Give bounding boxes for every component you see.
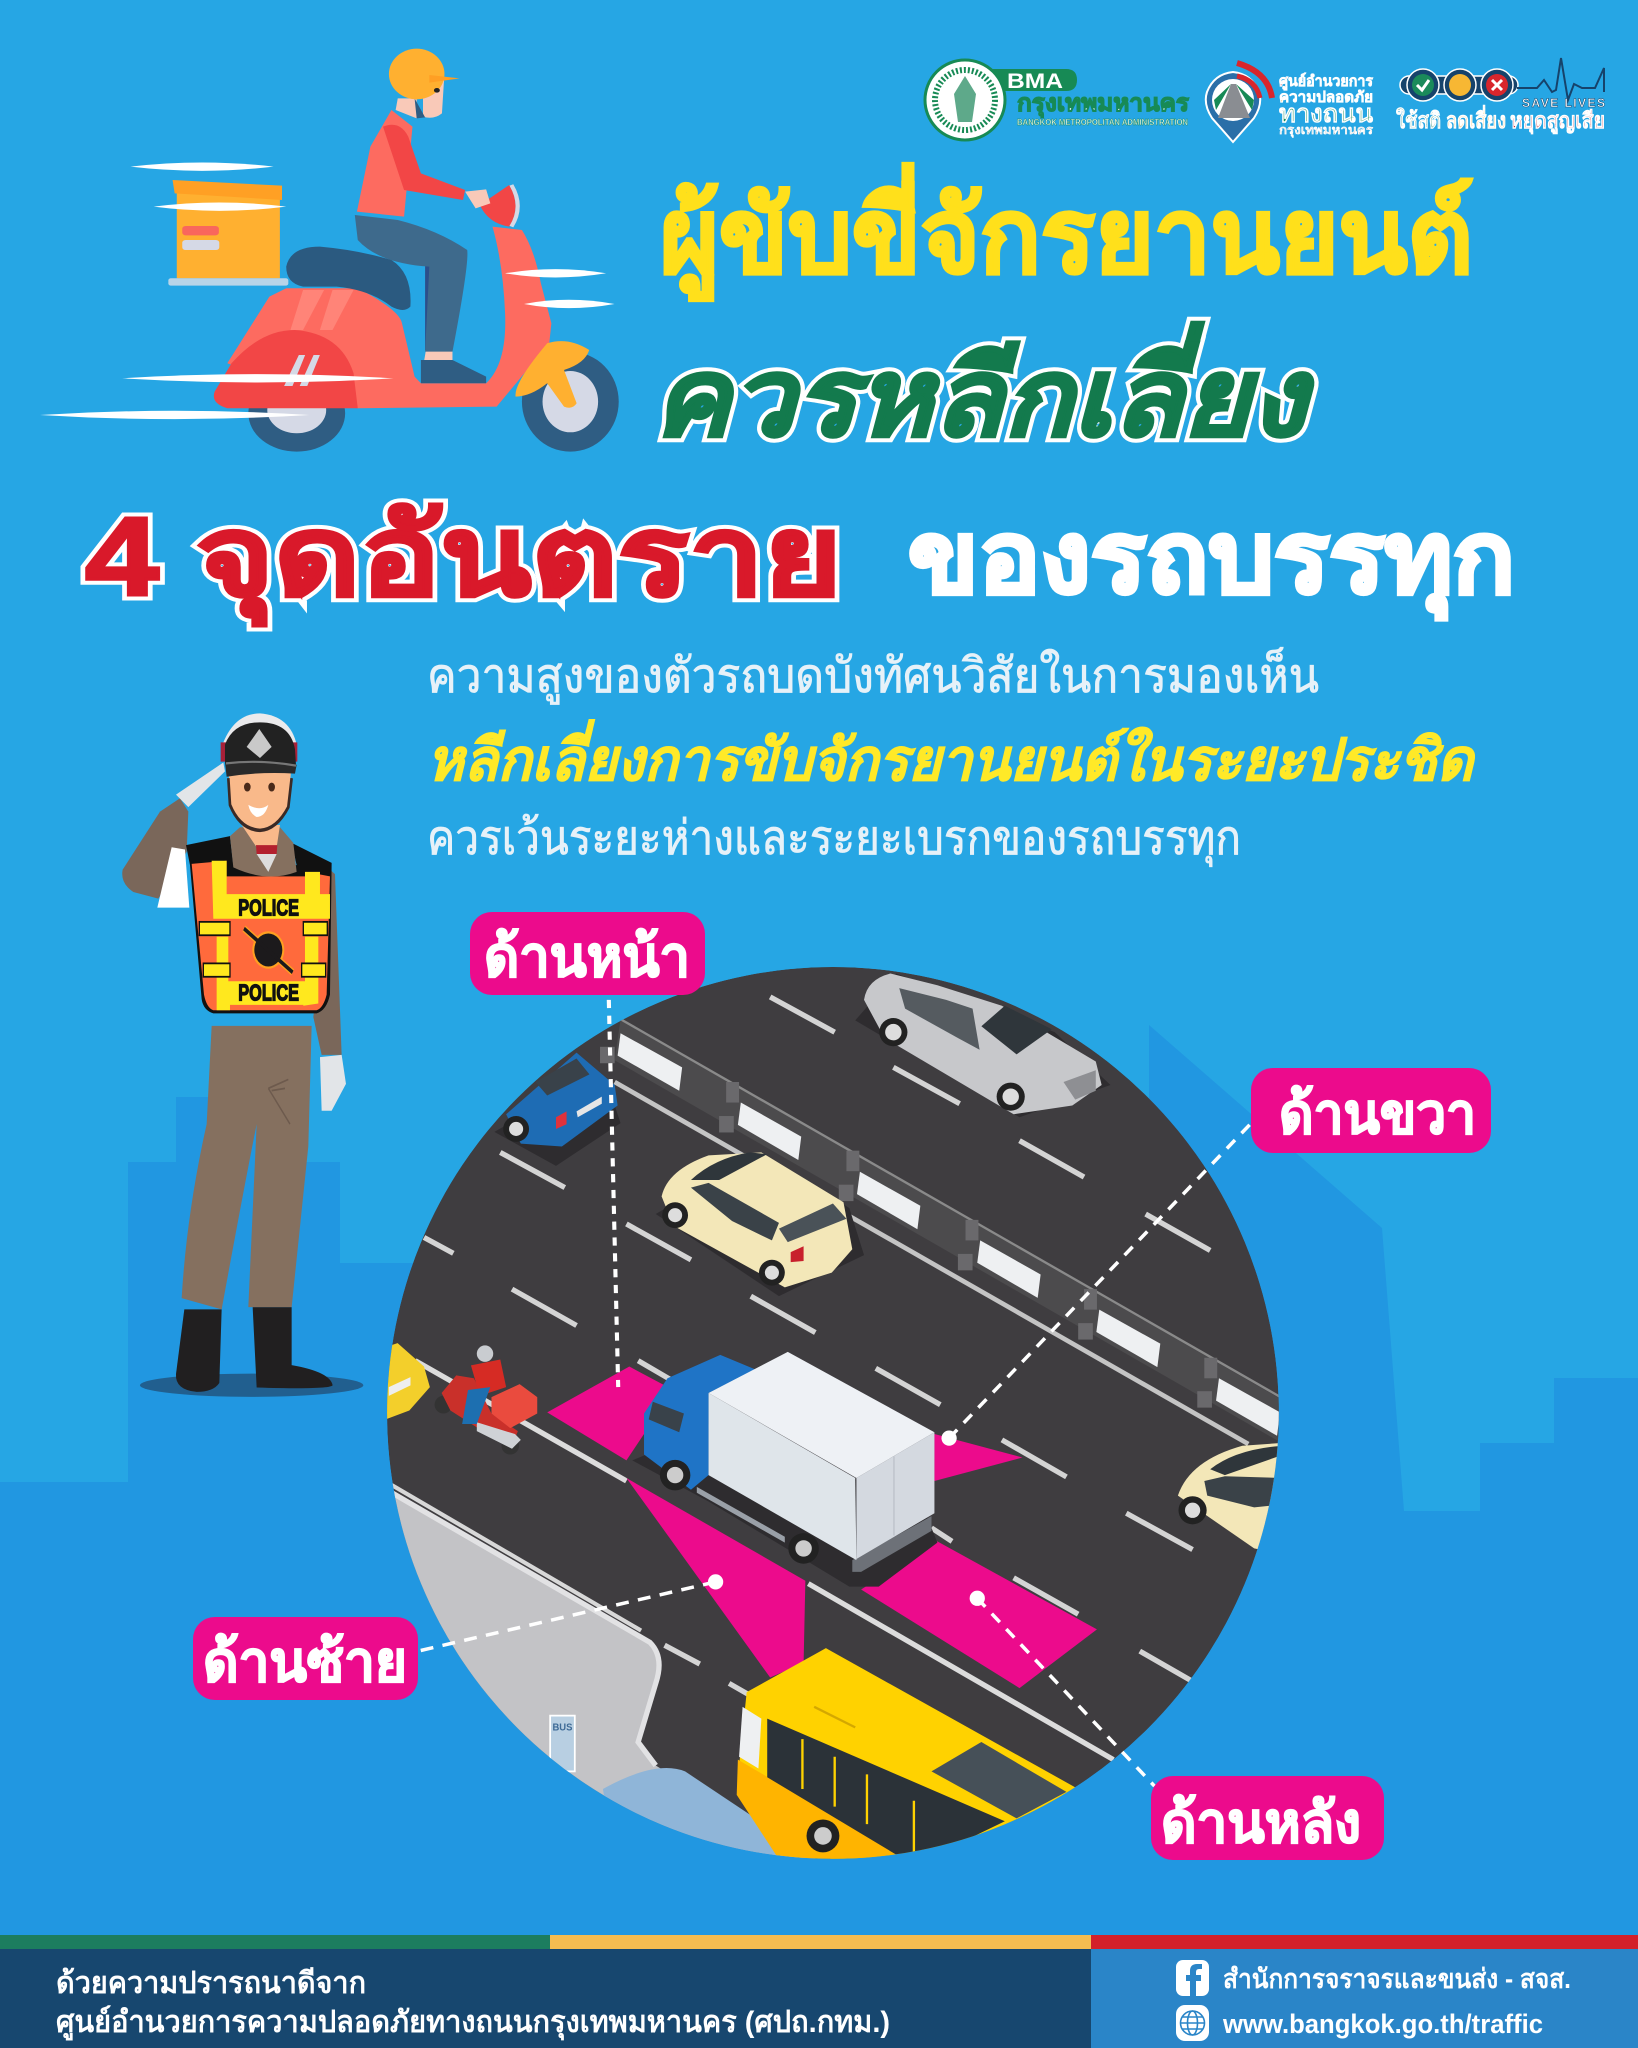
safety vest bbox=[186, 836, 332, 1013]
safety vest: POLICE bbox=[238, 895, 299, 921]
contact: agency: สำนักการจราจรและขนส่ง - สจส. bbox=[1223, 1964, 1571, 1994]
illustration: delivery rider on scooter bbox=[40, 49, 619, 452]
dotted leader: left bbox=[418, 1574, 723, 1651]
title line 3: white: ของรถบรรทุก bbox=[908, 502, 1515, 620]
yellow bus bbox=[737, 1648, 1078, 1865]
logo: BMA: BANGKOK METROPOLITAN ADMINISTRATION bbox=[1017, 118, 1188, 127]
footer credit: ศูนย์อำนวยการความปลอดภัยทางถนนกรุงเทพมหานคร (ศปถ.กทม.) bbox=[56, 2005, 890, 2041]
logo: BMA bbox=[925, 60, 1189, 140]
contact: website: www.bangkok.go.th/traffic bbox=[1222, 2009, 1543, 2039]
title line 3: red: 4 จุดอันตราย bbox=[85, 494, 842, 627]
footer credit: ด้วยความปรารถนาดีจาก bbox=[56, 1967, 366, 2000]
label: right bbox=[1251, 1068, 1491, 1153]
icon: globe bbox=[1176, 2005, 1209, 2041]
logo: BMA: กรุงเทพมหานคร bbox=[1017, 90, 1189, 119]
logo: road safety centre bbox=[1206, 63, 1374, 142]
car: yellow taxi bbox=[387, 1343, 430, 1419]
logo: road safety centre: กรุงเทพมหานคร bbox=[1279, 123, 1374, 138]
icon: facebook bbox=[1176, 1960, 1209, 1996]
bus stop sign bbox=[550, 1716, 575, 1771]
dotted leader: right bbox=[941, 1123, 1251, 1446]
dotted leader: front bbox=[609, 1000, 618, 1387]
logo: road safety centre: ศูนย์อำนวยการ bbox=[1279, 72, 1374, 91]
car: cream hatchback bbox=[656, 1152, 864, 1296]
footer bbox=[0, 1935, 1638, 2048]
barrier panels bbox=[618, 1033, 1280, 1436]
logo: road safety centre: ทางถนน bbox=[1279, 100, 1373, 128]
car: blue bbox=[494, 1053, 621, 1166]
logo: save lives traffic light: ใช้สติ bbox=[1396, 107, 1441, 133]
speed lines bbox=[40, 162, 615, 419]
label: right: ด้านขวา bbox=[1279, 1082, 1476, 1145]
illustration: saluting traffic police officer bbox=[122, 713, 363, 1397]
motorcycle rider bbox=[435, 1345, 537, 1455]
road dashes bbox=[424, 997, 1210, 1695]
logo: road safety centre: ความปลอดภัย bbox=[1279, 89, 1373, 106]
logo: save lives traffic light bbox=[1396, 58, 1605, 135]
car: cream right bbox=[1178, 1443, 1284, 1554]
logo: BMA: BMA bbox=[1007, 70, 1063, 93]
label: rear: ด้านหลัง bbox=[1161, 1791, 1361, 1854]
blind spot: rear bbox=[861, 1541, 1097, 1688]
body line 3: ควรเว้นระยะห่างและระยะเบรกของรถบรรทุก bbox=[427, 812, 1241, 867]
dotted leader: rear bbox=[970, 1591, 1154, 1786]
road scene circle bbox=[374, 967, 1284, 1870]
label: rear bbox=[1151, 1776, 1384, 1860]
truck bbox=[632, 1352, 937, 1587]
bus stop sign: BUS bbox=[552, 1721, 572, 1733]
logos bbox=[925, 58, 1605, 142]
body line 2 highlighted: หลีกเลี่ยงการขับจักรยานยนต์ในระยะประชิด bbox=[427, 719, 1476, 793]
car: silver sedan bbox=[855, 973, 1110, 1117]
body text bbox=[427, 647, 1476, 867]
label: left: ด้านซ้าย bbox=[203, 1630, 407, 1693]
body line 1: ความสูงของตัวรถบดบังทัศนวิสัยในการมองเห็น bbox=[427, 647, 1319, 705]
safety vest: POLICE bbox=[238, 980, 299, 1006]
logo: save lives traffic light: SAVE LIVES bbox=[1522, 96, 1605, 110]
title bbox=[85, 163, 1515, 627]
label: front bbox=[470, 912, 705, 995]
logo: save lives traffic light: หยุดสูญเสีย bbox=[1510, 108, 1605, 135]
blind spot: front bbox=[547, 1367, 673, 1460]
title line 2 outline: ควรหลีกเลี่ยง bbox=[653, 322, 1315, 458]
title line 2: ควรหลีกเลี่ยง bbox=[653, 322, 1315, 458]
title line 3 red outline: 4 จุดอันตราย bbox=[85, 494, 842, 627]
label: front: ด้านหน้า bbox=[484, 925, 690, 988]
blind spot: right bbox=[934, 1434, 1022, 1481]
blind spot: left bbox=[626, 1478, 805, 1678]
logo: save lives traffic light: ลดเสี่ยง bbox=[1446, 104, 1506, 133]
footer credit bbox=[56, 1967, 890, 2041]
title line 1: ผู้ขับขี่จักรยานยนต์ bbox=[660, 163, 1473, 301]
